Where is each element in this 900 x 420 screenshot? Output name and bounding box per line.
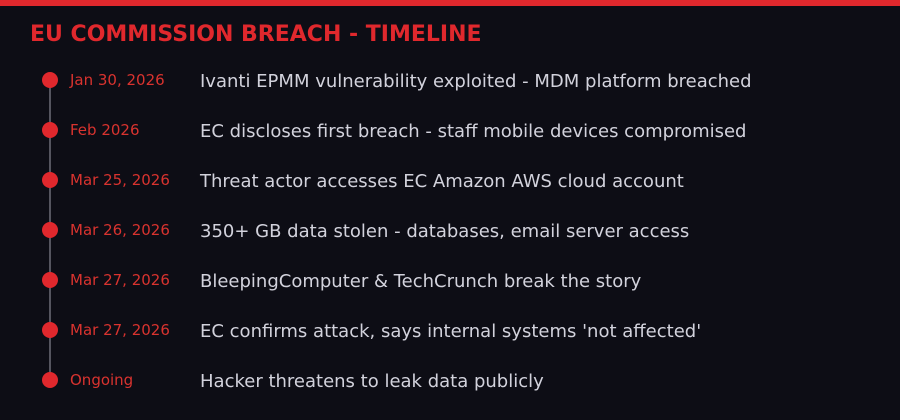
top accent bar: [0, 0, 900, 6]
event 4: Mar 26, 2026: [70, 221, 170, 239]
event 6: EC confirms attack, says internal systems 'not affected': [200, 321, 701, 342]
event 1: Ivanti EPMM vulnerability exploited - MDM platform breached: [200, 71, 752, 92]
event 7: Hacker threatens to leak data publicly: [200, 371, 544, 392]
timeline: [42, 71, 752, 392]
event 1: Jan 30, 2026: [69, 71, 165, 89]
event 2: EC discloses first breach - staff mobile devices compromised: [200, 121, 746, 142]
event 3: Threat actor accesses EC Amazon AWS cloud account: [199, 171, 684, 192]
event 3: Mar 25, 2026: [70, 171, 170, 189]
event 5: Mar 27, 2026: [70, 271, 170, 289]
event 2: Feb 2026: [70, 121, 140, 139]
event 5: BleepingComputer & TechCrunch break the story: [200, 271, 642, 292]
title: EU COMMISSION BREACH - TIMELINE: [30, 22, 482, 47]
event 4: 350+ GB data stolen - databases, email server access: [200, 221, 689, 242]
event 6: Mar 27, 2026: [70, 321, 170, 339]
event 7: [42, 371, 544, 392]
event 7: Ongoing: [70, 371, 133, 389]
